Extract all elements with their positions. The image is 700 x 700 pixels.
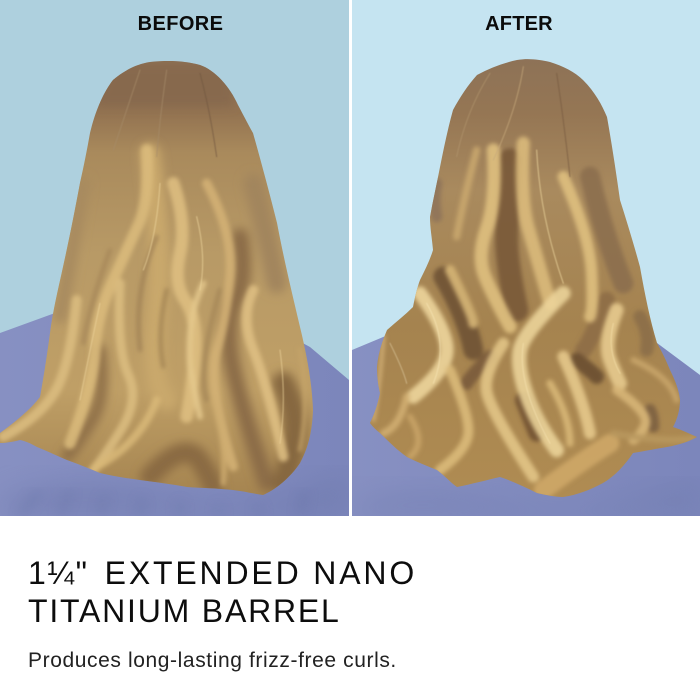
label: before: BEFORE bbox=[138, 13, 223, 35]
panel: before bbox=[0, 0, 349, 516]
before: hair bbox=[0, 61, 313, 495]
divider bbox=[349, 0, 352, 516]
after: blouse bbox=[352, 336, 700, 516]
panel: after bbox=[352, 0, 700, 516]
heading line 2: TITANIUM BARREL bbox=[28, 593, 341, 629]
subheading: Produces long-lasting frizz-free curls. bbox=[28, 649, 397, 672]
before and after photos bbox=[0, 0, 700, 516]
before: blouse bbox=[0, 300, 349, 516]
after: hair bbox=[352, 55, 700, 505]
heading line 1: 1¼" EXTENDED NANO bbox=[28, 555, 417, 591]
label: after: AFTER bbox=[485, 13, 553, 35]
